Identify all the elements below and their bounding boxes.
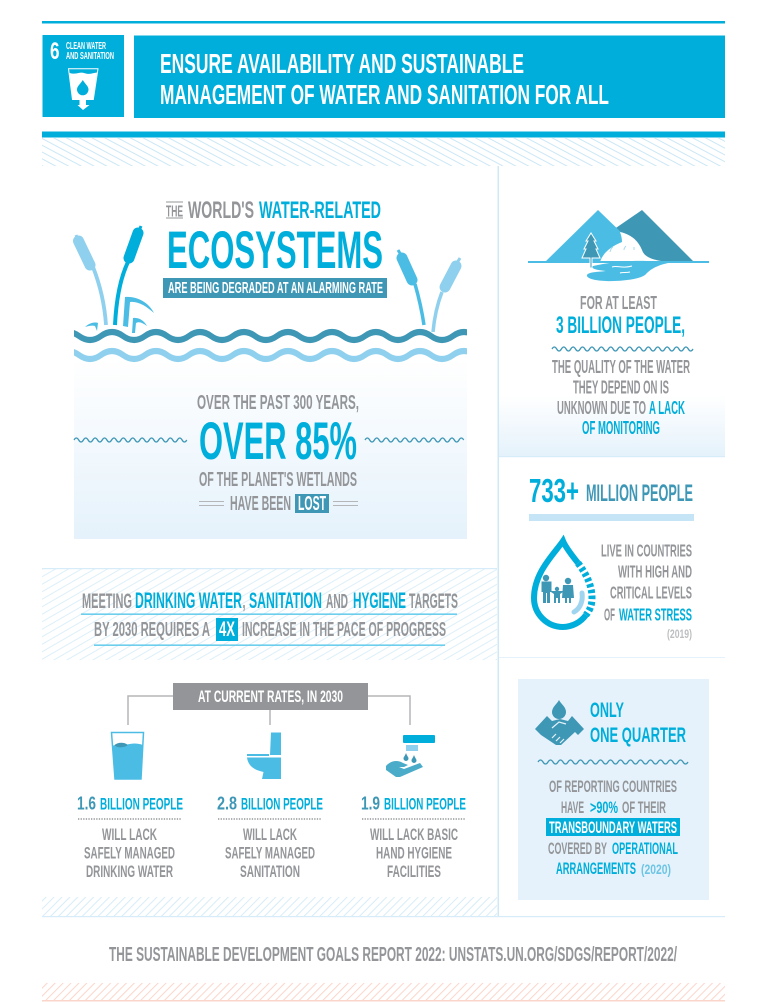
subheading bar: ARE BEING DEGRADED AT AN ALARMING RATE	[168, 280, 383, 297]
icon: handshake with drop	[535, 700, 584, 745]
text block: meeting targets: INCREASE IN THE PACE OF PROGRESS	[242, 619, 446, 641]
stat heading: 733+	[529, 472, 579, 509]
text: quality of water: A LACK	[649, 398, 685, 418]
squiggle divider	[538, 760, 688, 764]
heading: only one quarter: ONE QUARTER	[590, 724, 686, 747]
heading box: AT CURRENT RATES, IN 2030	[198, 687, 343, 706]
subheading bar	[163, 278, 387, 298]
stat heading	[529, 472, 693, 509]
text: water stress: (2019)	[667, 629, 692, 641]
panel: ecosystems	[73, 201, 467, 539]
text block: meeting targets: 4X	[219, 618, 235, 641]
stat: 2.8 billion: WILL LACK	[243, 825, 297, 844]
heading: the world's water-related: THE	[166, 204, 183, 220]
text: quality of water: THEY DEPEND ON IS	[573, 378, 669, 398]
text: reporting countries: HAVE	[561, 798, 584, 817]
heading: only one quarter: ONLY	[590, 699, 624, 722]
stat: over 85% wetlands lost: OF THE PLANET'S WETLANDS	[199, 469, 357, 491]
goal name: AND SANITATION	[66, 51, 114, 62]
stat: over 85% wetlands lost: LOST	[298, 492, 326, 515]
stat: 1.6 billion: 1.6	[77, 792, 96, 814]
text block: meeting targets: HYGIENE	[353, 588, 406, 613]
goal name	[66, 41, 114, 62]
stat: over 85% wetlands lost: HAVE BEEN	[230, 493, 291, 515]
connector lines	[128, 696, 410, 725]
text: quality of water: UNKNOWN DUE TO	[557, 398, 646, 418]
text block: meeting targets	[81, 588, 458, 646]
stat: 1.6 billion: BILLION PEOPLE	[100, 794, 183, 814]
stat: 1.6 billion	[77, 792, 183, 881]
text: reporting countries: OF THEIR	[622, 798, 666, 817]
panel: at current rates in 2030	[77, 683, 466, 881]
text: quality of water	[552, 357, 690, 438]
heading: the world's water-related: WORLD'S	[188, 197, 254, 224]
heading box	[173, 683, 368, 710]
heading: the world's water-related: WATER-RELATED	[259, 197, 381, 224]
text block: meeting targets: DRINKING WATER	[135, 588, 242, 613]
stat: 2.8 billion: SAFELY MANAGED	[225, 844, 315, 862]
stat: 1.6 billion: SAFELY MANAGED	[84, 844, 175, 862]
goal badge: SDG 6	[42, 35, 124, 117]
text block: meeting targets: ,	[242, 591, 246, 613]
heading: ecosystems: ECOSYSTEMS	[167, 221, 383, 280]
text block: meeting targets: AND	[326, 591, 348, 613]
stat: 1.9 billion: HAND HYGIENE	[376, 844, 452, 862]
text block: meeting targets: SANITATION	[249, 588, 322, 613]
stat: 1.9 billion: FACILITIES	[387, 862, 441, 881]
text: water stress	[601, 540, 692, 641]
text: quality of water: OF MONITORING	[582, 418, 660, 438]
stat: 1.6 billion: WILL LACK	[102, 825, 157, 844]
text: water stress: OF	[604, 604, 615, 624]
stat: over 85% wetlands lost	[74, 392, 464, 515]
title banner	[134, 36, 725, 118]
goal number: 6	[50, 38, 60, 65]
text: water stress: CRITICAL LEVELS	[610, 582, 692, 602]
heading: the world's water-related	[166, 197, 381, 224]
stat: 2.8 billion: SANITATION	[240, 862, 300, 881]
panel: only one quarter	[518, 679, 709, 900]
wetlands gradient background	[74, 358, 467, 539]
text: reporting countries: COVERED BY	[548, 839, 607, 858]
stat: 2.8 billion: 2.8	[217, 792, 237, 814]
panel gradient	[499, 395, 725, 456]
icon: waves	[57, 332, 497, 359]
panel: 3 billion people	[499, 210, 725, 457]
text block: meeting targets: MEETING	[82, 590, 132, 613]
icon: water drop with family	[534, 541, 592, 627]
stat: 2.8 billion	[217, 792, 323, 881]
text block: meeting targets: BY 2030 REQUIRES A	[94, 619, 210, 641]
icon: hand washing	[386, 735, 435, 777]
text: TARGETS	[409, 590, 458, 613]
stat: 1.9 billion: 1.9	[361, 792, 380, 814]
stat: 1.9 billion	[361, 792, 466, 881]
panel: 733+ million people	[529, 472, 694, 641]
text: water stress: LIVE IN COUNTRIES	[601, 540, 692, 560]
text: reporting countries: >90%	[590, 798, 618, 817]
stat: over 85% wetlands lost: OVER 85%	[199, 412, 357, 471]
text: water stress: WATER STRESS	[619, 604, 692, 624]
stat: 1.9 billion: WILL LACK BASIC	[370, 825, 458, 844]
stat: 1.9 billion: BILLION PEOPLE	[384, 794, 466, 814]
text: reporting countries: ARRANGEMENTS	[556, 859, 636, 878]
icon: toilet	[247, 732, 281, 779]
stat: 1.6 billion: DRINKING WATER	[86, 862, 173, 881]
icon: right reeds	[398, 250, 460, 332]
text: water stress: WITH HIGH AND	[618, 562, 692, 582]
heading: only one quarter	[590, 699, 686, 747]
text: reporting countries: (2020)	[641, 862, 671, 877]
text: reporting countries: OPERATIONAL	[612, 839, 678, 858]
title banner: ENSURE AVAILABILITY AND SUSTAINABLE	[160, 48, 524, 79]
stat: 2.8 billion: BILLION PEOPLE	[241, 794, 323, 814]
squiggle divider	[552, 347, 693, 351]
icon: glass of water	[112, 732, 144, 779]
text: reporting countries	[546, 777, 680, 878]
text: for at least 3 billion people: FOR AT LEAST	[580, 292, 657, 313]
icon: left reeds	[76, 226, 154, 333]
goal name: CLEAN WATER	[66, 41, 106, 52]
text: for at least 3 billion people	[556, 292, 685, 339]
icon: mountains, lake and tree	[528, 210, 709, 281]
icon: glass with water drop and arrow	[68, 69, 98, 110]
stat: over 85% wetlands lost: OVER THE PAST 300 YEARS,	[197, 392, 359, 414]
